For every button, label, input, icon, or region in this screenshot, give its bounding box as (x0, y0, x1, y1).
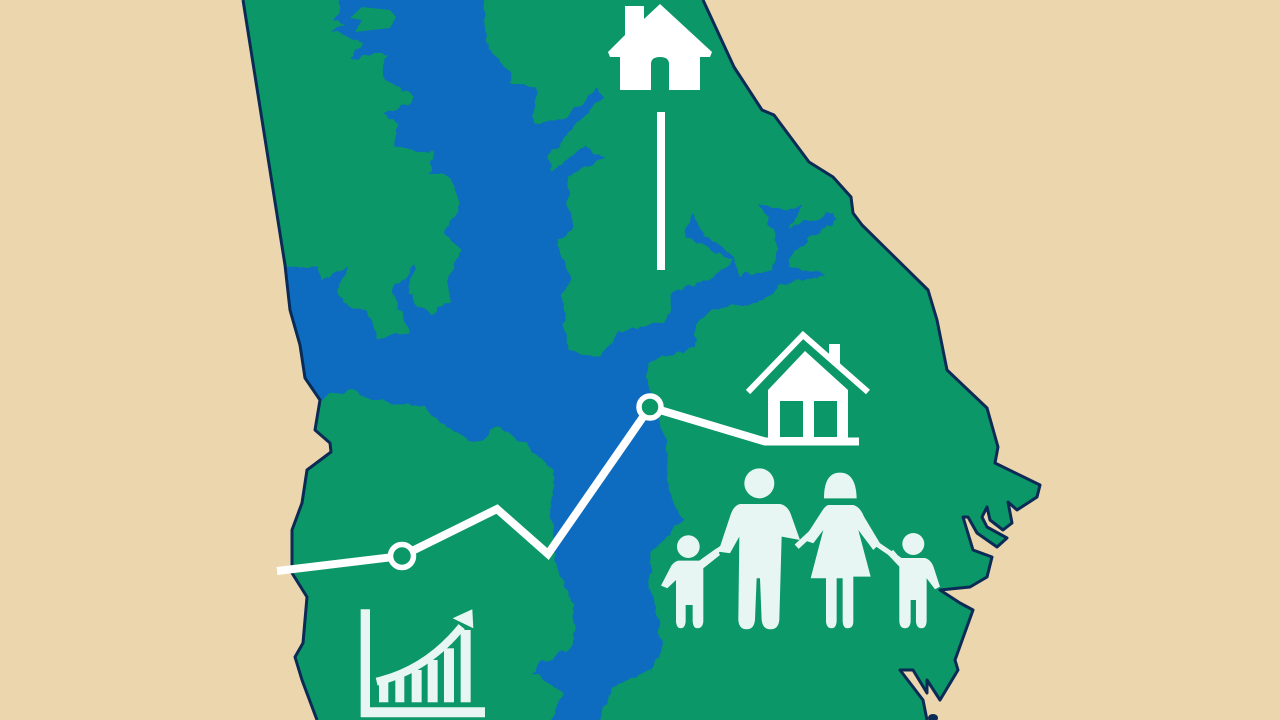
father (703, 468, 818, 629)
mother (803, 473, 905, 628)
right child (887, 533, 940, 628)
chart node: left (390, 544, 414, 568)
icon: family (661, 468, 940, 629)
map: green island (350, 7, 396, 32)
chart bars (379, 630, 471, 702)
coastline speck (928, 714, 938, 720)
illustration: map of Georgia with icons (242, 0, 1042, 720)
icon: top house (608, 4, 712, 90)
line chart with two nodes (277, 396, 859, 571)
map: blue river region (270, 0, 837, 720)
map: dark coastline and border (243, 0, 1040, 720)
icon: right house (748, 335, 868, 438)
chart axes (361, 609, 485, 717)
chart node: right (639, 396, 661, 418)
vertical line (657, 112, 665, 270)
left child (661, 535, 720, 628)
growth arrow (377, 609, 473, 682)
icon: growth bar chart (361, 609, 485, 717)
map: state shape (243, 0, 1040, 720)
